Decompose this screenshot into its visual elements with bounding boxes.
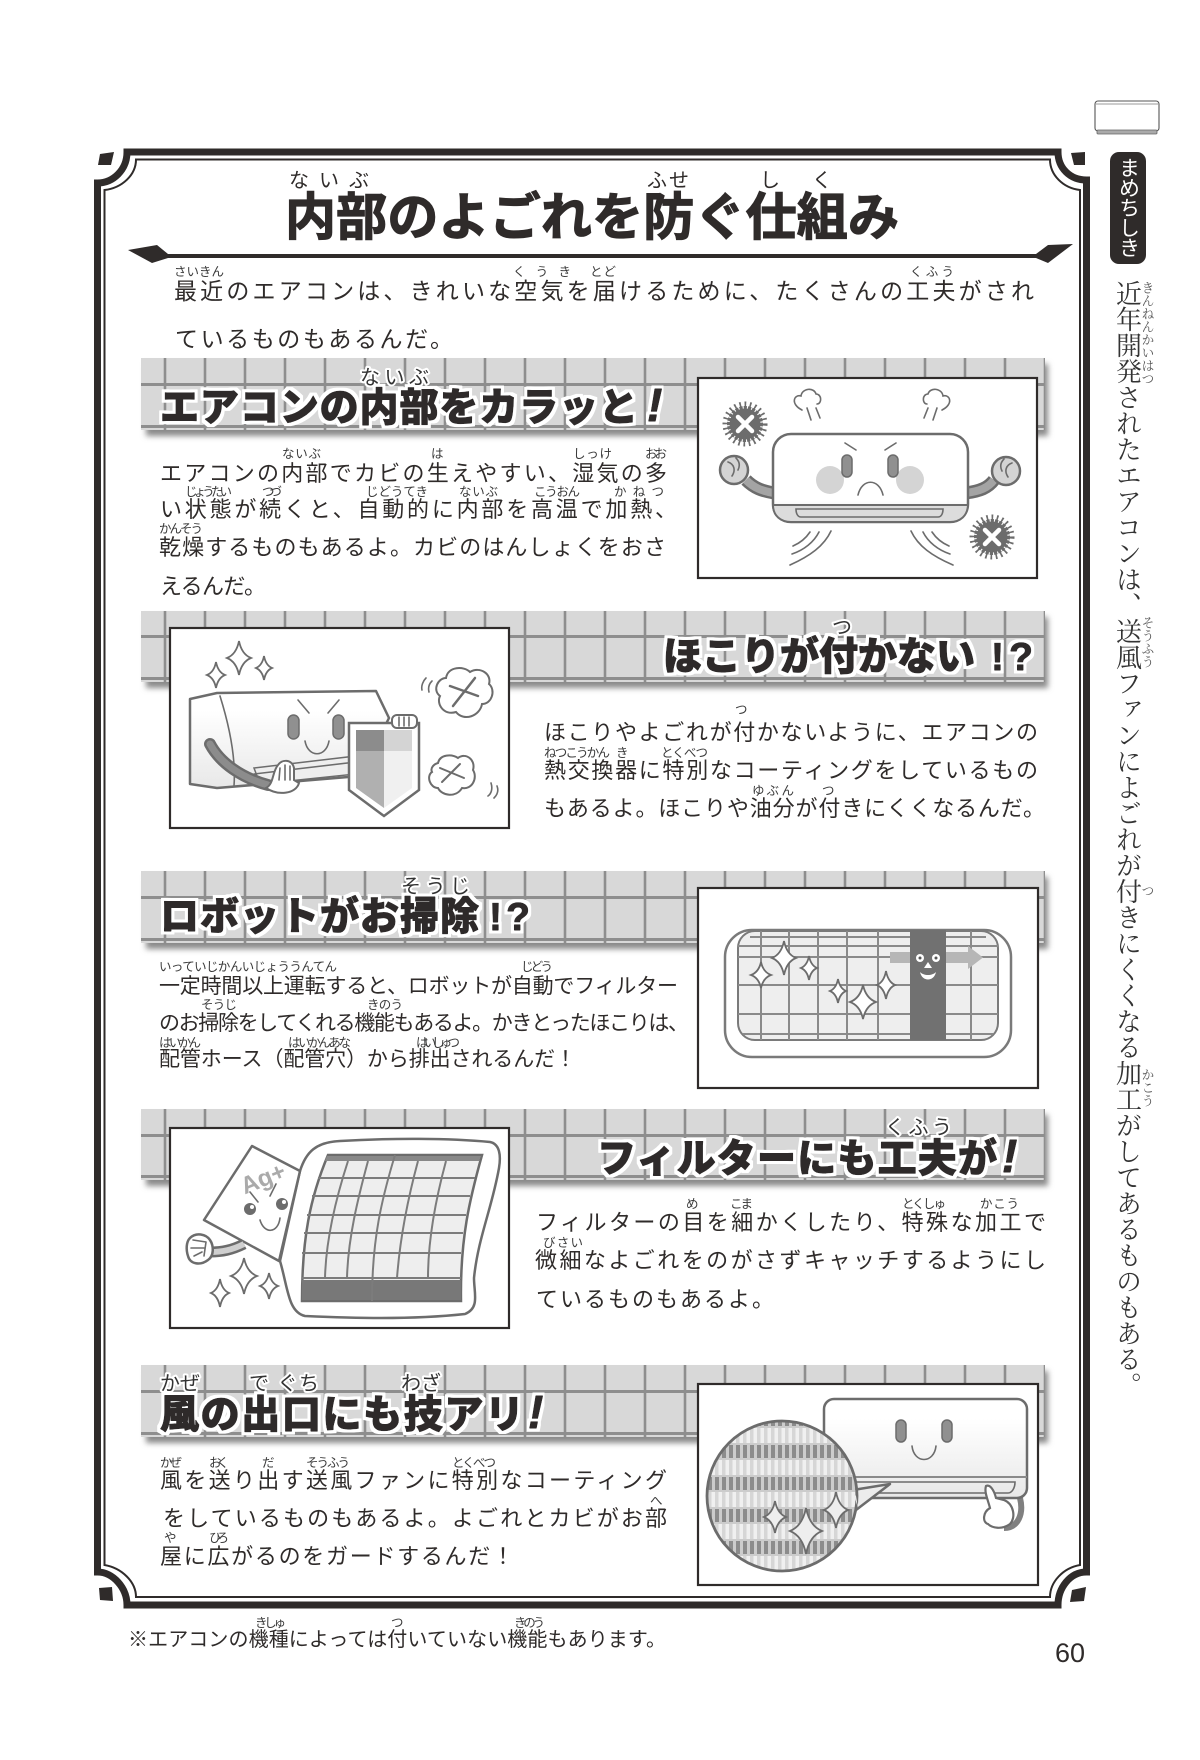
text block: section 1: じょうたい [185, 485, 232, 499]
text block: section 3: じどう [521, 960, 553, 974]
filter grid [302, 1155, 482, 1301]
heading: section 1 [160, 367, 662, 431]
text block: section 5: だ [262, 1456, 275, 1470]
filter outline [280, 1139, 500, 1318]
heading: section 4: フィルターにも工夫が [597, 1137, 997, 1181]
text block: section 1: かねつ [614, 485, 664, 499]
heading: section 2: ほこりが付かない [663, 635, 975, 679]
icon: dust clouds [422, 668, 498, 798]
decorative page frame [98, 152, 1086, 1605]
heading: section 5: かぜ [160, 1373, 200, 1395]
arm and hand [210, 744, 299, 793]
footnote: きのう [514, 1616, 545, 1630]
title: 内部のよごれを防ぐ仕組み [285, 189, 899, 246]
icon: steam puffs [794, 389, 950, 420]
text block: section 1: 乾燥するものもあるよ。カビのはんしょくをおさ [159, 535, 666, 560]
text block: section 5: おく [209, 1456, 229, 1470]
icon: mold spore right [972, 517, 1012, 557]
panel: section 4 band [141, 1109, 1048, 1186]
text block: section 1: おお [645, 447, 667, 461]
filter grid [738, 931, 998, 1040]
heading: section 1: エアコンの内部をカラッと [160, 387, 638, 430]
icon: sparkles [751, 941, 895, 1019]
heading: section 2: !? [991, 636, 1033, 679]
panel: section 5 illustration, air conditioner with magnified coating [698, 1384, 1038, 1585]
heading: section 1: ! [647, 379, 662, 431]
air conditioner body with face [824, 1399, 1027, 1498]
text block: section 5: 屋に広がるのをガードするんだ！ [160, 1544, 514, 1569]
heading: section 4 [597, 1117, 1017, 1182]
footnote [128, 1616, 666, 1651]
panel: section 3 band [141, 871, 1048, 949]
text block: section 2: もあるよ。ほこりや油分が付きにくくなるんだ。 [544, 796, 1045, 821]
intro text: くふう [910, 265, 954, 279]
title underline [128, 244, 1073, 263]
heading: section 3: ロボットがお掃除 [160, 895, 479, 939]
wind lines [790, 531, 953, 565]
magnifier circle callout [707, 1421, 890, 1571]
title: ないぶ [289, 170, 369, 192]
heading: section 4: くふう [885, 1117, 952, 1139]
text block: section 1: は [431, 447, 444, 461]
text block: section 1: ないぶ [459, 485, 498, 499]
panel: section 1 band [141, 358, 1048, 436]
cleaning robot arrow [890, 946, 983, 969]
intro text: さいきん [174, 265, 224, 279]
text block: section 2: 熱交換器に特別なコーティングをしているもの [544, 758, 1038, 783]
text block: section 2: つ [822, 784, 835, 798]
text block: section 2: き [616, 746, 629, 760]
text block: section 5: をしているものもあるよ。よごれとカビがお部 [163, 1506, 667, 1531]
heading: section 1: ないぶ [360, 367, 429, 389]
text block: section 2: ねつこうかん [544, 746, 610, 760]
text block: section 5: や [164, 1531, 177, 1545]
icon: sparkles [211, 1258, 278, 1307]
text block: section 1: しっけ [573, 447, 612, 461]
air conditioner front outline [725, 930, 1011, 1057]
icon: mold spore left [725, 404, 765, 444]
footnote: きしゅ [255, 1616, 286, 1630]
text block: section 3: はいしゅつ [416, 1036, 460, 1050]
text block: section 5: そうふう [306, 1456, 350, 1470]
text block: section 2 [544, 703, 1045, 821]
arm and fist [187, 1234, 244, 1263]
title: し [760, 170, 780, 192]
text block: section 5: 風を送り出す送風ファンに特別なコーティング [160, 1468, 667, 1493]
heading: section 3: そうじ [401, 876, 470, 898]
text block: section 3 [159, 960, 689, 1071]
heading: section 3 [160, 876, 530, 939]
icon: sparkles [207, 641, 272, 688]
text block: section 1: じどうてき [366, 485, 428, 499]
title: く [812, 170, 832, 192]
panel: section 4 illustration, Ag+ filter [170, 1128, 509, 1328]
text block: section 4: 微細なよごれをのがさずキャッチするようにし [535, 1248, 1046, 1273]
text block: section 4: とくしゅ [902, 1197, 946, 1211]
tab: mamechishiki [1110, 152, 1146, 264]
text block: section 1: エアコンの内部でカビの生えやすい、湿気の多 [160, 461, 667, 486]
intro text: ているものもあるんだ。 [175, 326, 453, 352]
text block: section 2: ゆぶん [752, 784, 794, 798]
text block: section 1: かんそう [159, 522, 203, 536]
intro text [174, 265, 1034, 352]
text block: section 2: とくべつ [661, 746, 708, 760]
arms and fists [720, 456, 1020, 493]
text block: section 1 [159, 447, 677, 599]
footnote: つ [391, 1616, 404, 1630]
text block: section 5: ひろ [209, 1531, 229, 1545]
panel: section 2 illustration, air conditioner with shield [170, 628, 509, 828]
text block: section 4: ているものもあるよ。 [536, 1287, 774, 1312]
text block: section 4: びさい [543, 1236, 583, 1250]
heading: section 3: !? [489, 896, 530, 939]
hose [1004, 1498, 1021, 1528]
air conditioner body [773, 434, 968, 522]
intro text: とど [590, 265, 616, 279]
text block: section 4: め [686, 1197, 699, 1211]
heading: section 2: つ [832, 617, 852, 639]
side column text: 近年開発されたエアコンは、送風ファンによごれが付きにくくなる加工がしてあるものもある。 [1112, 280, 1142, 1398]
heading: section 5: ! [528, 1386, 543, 1438]
heading: section 5 [160, 1371, 543, 1438]
text block: section 3: そうじ [201, 998, 237, 1012]
text block: section 1: ないぶ [282, 447, 321, 461]
heading: section 4: ! [1002, 1130, 1017, 1182]
text block: section 3: いっていじかんいじょううんてん [159, 960, 337, 974]
heading: section 5: で ぐち [249, 1373, 319, 1395]
intro text: 最近のエアコンは、きれいな空気を届けるために、たくさんの工夫がされ [174, 278, 1034, 304]
heading: section 5: 風の出口にも技アリ [160, 1394, 524, 1437]
side column text [1112, 280, 1154, 1398]
text block: section 3: はいかんあな [288, 1036, 351, 1050]
text block: section 4: かこう [980, 1197, 1019, 1211]
icon: air conditioner [1095, 101, 1159, 134]
side column text: つ [1140, 884, 1154, 897]
silver ion tag with face [204, 1146, 300, 1261]
tab: mamechishiki: まめちしき [1116, 157, 1140, 257]
text block: section 1: えるんだ。 [160, 574, 266, 599]
side column text: かこう [1140, 1068, 1154, 1107]
text block: section 5: かぜ [160, 1456, 182, 1470]
text block: section 1: い状態が続くと、自動的に内部を高温で加熱、 [160, 497, 677, 522]
title: ふせ [647, 170, 689, 192]
text block: section 3: 配管ホース（配管穴）から排出されるんだ！ [159, 1048, 576, 1071]
icon: pointing hand [984, 1486, 1013, 1528]
text block: section 4 [535, 1197, 1046, 1312]
air conditioner body, side view [190, 691, 389, 788]
text block: section 1: こうおん [534, 485, 580, 499]
intro text: くうき [513, 265, 571, 279]
page number: 60 [1055, 1638, 1085, 1668]
side column text: そうふう [1140, 616, 1154, 668]
heading: section 5: わざ [401, 1371, 441, 1395]
text block: section 5: とくべつ [452, 1456, 496, 1470]
panel: section 1 illustration, angry air conditioner [698, 378, 1037, 578]
text block: section 2: ほこりやよごれが付かないように、エアコンの [544, 720, 1038, 745]
heading: section 2 [663, 617, 1033, 679]
text block: section 3: のお掃除をしてくれる機能もあるよ。かきとったほこりは、 [159, 1012, 689, 1035]
text block: section 1: つづ [262, 485, 282, 499]
side column text: きんねんかいはつ [1140, 281, 1154, 385]
panel: section 2 band [141, 611, 1048, 688]
robot with face [910, 930, 946, 1040]
text block: section 4: こま [730, 1197, 753, 1211]
silver ion tag with face: Ag+ [237, 1158, 290, 1200]
text block: section 3: 一定時間以上運転すると、ロボットが自動でフィルター [159, 975, 678, 998]
text block: section 5 [160, 1456, 667, 1569]
text block: section 5: へ [650, 1494, 663, 1508]
text block: section 4: フィルターの目を細かくしたり、特殊な加工で [536, 1210, 1046, 1235]
icon: sparkles [764, 1492, 848, 1554]
panel: section 5 band [141, 1365, 1048, 1443]
icon: shield [349, 715, 419, 816]
footnote: ※エアコンの機種によっては付いていない機能もあります。 [128, 1628, 666, 1651]
text block: section 3: きのう [367, 998, 403, 1012]
text block: section 2: つ [735, 703, 748, 717]
panel: section 3 illustration, filter cleaning robot [698, 888, 1038, 1088]
text block: section 3: はいかん [159, 1036, 201, 1050]
